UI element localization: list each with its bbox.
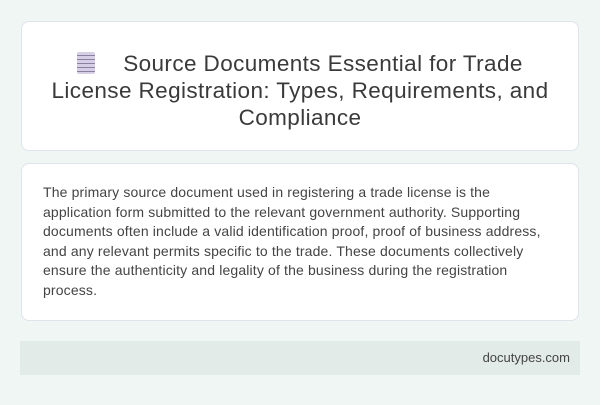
text block [43,184,541,298]
footer [20,341,580,375]
title [52,51,548,130]
text block: documents often include a valid identification proof, proof of business address, [43,223,541,239]
panel: description [21,163,579,321]
footer text: docutypes.com [483,350,570,365]
panel: title card [21,21,579,151]
title: Source Documents Essential for Trade [123,51,523,76]
text block: process. [43,282,97,298]
title: Compliance [239,105,361,130]
text block: ensure the authenticity and legality of the business during the registration [43,262,507,278]
icon: document scroll [77,52,95,74]
text block: and any relevant permits specific to the trade. These documents collectively [43,242,523,258]
text block: application form submitted to the relevant government authority. Supporting [43,204,520,220]
text block: The primary source document used in registering a trade license is the [43,184,490,200]
title: License Registration: Types, Requirements, and [52,78,548,103]
